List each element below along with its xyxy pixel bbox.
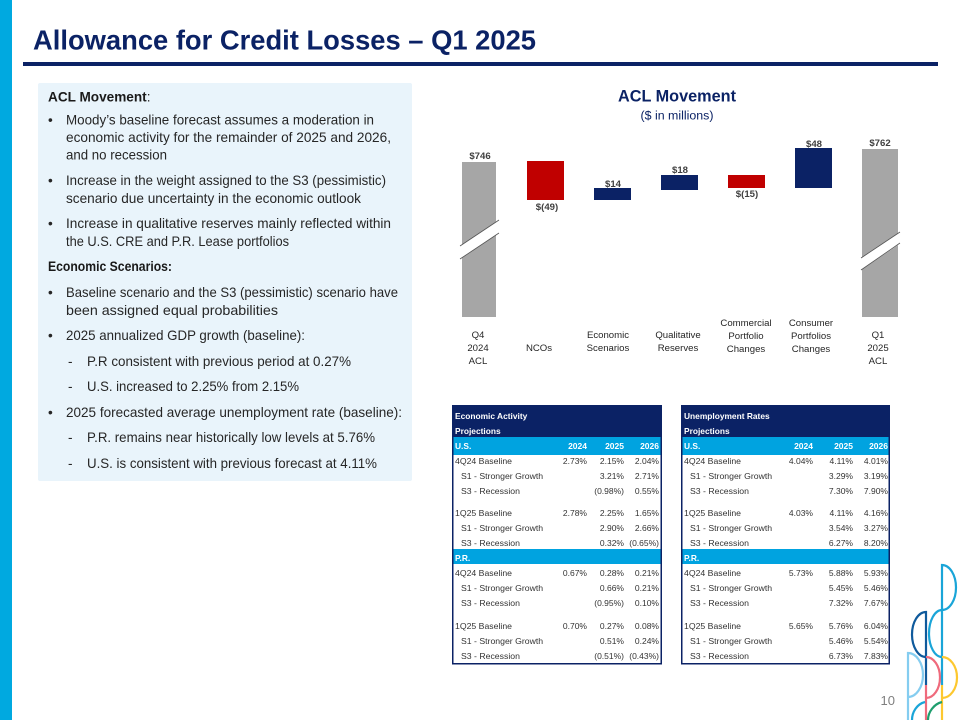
bar: Commercial Portfolio Changes: $(15) [736, 189, 758, 200]
table: Unemployment Rates Projections: 1Q25 Baseline [684, 621, 741, 631]
table: Unemployment Rates Projections: 5.45% [829, 583, 853, 593]
text block: GDP growth: - [68, 379, 73, 394]
table: Unemployment Rates Projections: 3.27% [864, 523, 888, 533]
table: Unemployment Rates Projections: Unemployment Rates [684, 411, 770, 421]
table: Economic Activity Projections: 2.25% [600, 508, 624, 518]
text block: qualitative reserves: Increase in qualitative reserves mainly reflected within [66, 216, 391, 231]
table: Unemployment Rates Projections: S1 - Stronger Growth [690, 523, 772, 533]
table: Economic Activity Projections: 0.32% [600, 538, 624, 548]
table: Economic Activity Projections: 2.71% [635, 471, 659, 481]
waterfall chart [459, 138, 901, 367]
bar: Consumer Portfolios Changes: $48 [806, 139, 823, 150]
table: Economic Activity Projections: 0.24% [635, 636, 659, 646]
category labels: Reserves [658, 343, 698, 354]
category labels: Portfolio [728, 331, 764, 342]
text block: GDP growth: U.S. increased to 2.25% from 2.15% [87, 379, 299, 394]
table: Unemployment Rates Projections: 6.04% [864, 621, 888, 631]
text block: S3 weight [48, 173, 386, 206]
category labels: Commercial [720, 318, 772, 329]
text block: unemployment: 2025 forecasted average unemployment rate (baseline): [66, 405, 402, 420]
table: Economic Activity Projections: 2.04% [635, 456, 659, 466]
table: Economic Activity Projections: (0.43%) [629, 651, 659, 661]
bar: Qualitative Reserves [661, 165, 698, 190]
table: Unemployment Rates Projections: 4.11% [830, 508, 853, 518]
text block: qualitative reserves: the U.S. CRE and P.R. Lease portfolios [66, 234, 289, 249]
table: Unemployment Rates Projections: S1 - Stronger Growth [690, 636, 772, 646]
text block: GDP growth: - [68, 354, 73, 369]
table: Economic Activity Projections: (0.95%) [594, 598, 624, 608]
table: Economic Activity Projections: S3 - Recession [461, 538, 520, 548]
table: Unemployment Rates Projections: 5.46% [864, 583, 888, 593]
text block: unemployment [48, 405, 402, 471]
table: Unemployment Rates Projections: 4.04% [789, 456, 813, 466]
table: Unemployment Rates Projections [681, 405, 890, 664]
text block: qualitative reserves [48, 216, 391, 249]
table: Economic Activity Projections: 2.90% [600, 523, 624, 533]
table: Unemployment Rates Projections: 6.73% [829, 651, 853, 661]
bar: Q1 2025 ACL: $762 [869, 138, 891, 149]
bar: Economic Scenarios [594, 179, 631, 200]
table: Economic Activity Projections: 2.66% [635, 523, 659, 533]
table: Unemployment Rates Projections: 5.65% [789, 621, 813, 631]
table: Unemployment Rates Projections: 4.03% [789, 508, 813, 518]
table: Economic Activity Projections: 2.73% [563, 456, 587, 466]
table: Unemployment Rates Projections: 5.76% [829, 621, 853, 631]
table: Economic Activity Projections: P.R. [455, 553, 470, 563]
icon: brand logo arcs [908, 565, 957, 720]
table: Unemployment Rates Projections: U.S. [684, 441, 700, 451]
table: Unemployment Rates Projections: S3 - Recession [690, 538, 749, 548]
table: Economic Activity Projections: S1 - Stronger Growth [461, 523, 543, 533]
bar: Q4 2024 ACL: $746 [469, 151, 491, 162]
bar: Consumer Portfolios Changes [795, 139, 832, 188]
table: Economic Activity Projections: 0.27% [600, 621, 624, 631]
table: Economic Activity Projections: 0.51% [600, 636, 624, 646]
bar: Qualitative Reserves: $18 [672, 165, 689, 176]
category labels: 2024 [467, 343, 489, 354]
table: Economic Activity Projections: 1.65% [635, 508, 659, 518]
category labels [467, 318, 889, 367]
text block: qualitative reserves: • [48, 216, 53, 231]
table: Unemployment Rates Projections: 5.93% [864, 568, 888, 578]
table: Economic Activity Projections: 0.21% [635, 568, 659, 578]
category labels: 2025 [867, 343, 889, 354]
table: Unemployment Rates Projections: 7.30% [829, 486, 853, 496]
category labels: Changes [727, 344, 765, 355]
text block: S3 weight: Increase in the weight assigned to the S3 (pessimistic) [66, 173, 386, 188]
table: Economic Activity Projections: 2025 [605, 441, 624, 451]
table: Economic Activity Projections: 0.67% [563, 568, 587, 578]
text block: equal probabilities: Baseline scenario and the S3 (pessimistic) scenario have [66, 285, 398, 300]
text block: unemployment: - [68, 456, 73, 471]
table: Economic Activity Projections: 0.70% [563, 621, 587, 631]
table: Economic Activity Projections: Projections [455, 426, 501, 436]
bar: NCOs [527, 161, 564, 213]
table: Economic Activity Projections: S3 - Recession [461, 598, 520, 608]
text block: equal probabilities: been assigned equal probabilities [66, 303, 278, 318]
table: Unemployment Rates Projections: 3.54% [829, 523, 853, 533]
table: Economic Activity Projections: 0.55% [635, 486, 659, 496]
text block: unemployment: • [48, 405, 53, 420]
table: Economic Activity Projections: S3 - Recession [461, 651, 520, 661]
table: Economic Activity Projections: 4Q24 Baseline [455, 456, 512, 466]
category labels: ACL [469, 356, 488, 367]
text block: Moody's forecast: Moody’s baseline forecast assumes a moderation in [66, 112, 374, 128]
category labels: Q4 [472, 330, 485, 341]
text block: equal probabilities [48, 285, 398, 318]
category labels: Scenarios [587, 343, 630, 354]
table: Unemployment Rates Projections: 7.90% [864, 486, 888, 496]
table: Unemployment Rates Projections: 4Q24 Baseline [684, 568, 741, 578]
table: Economic Activity Projections: 1Q25 Baseline [455, 508, 512, 518]
category labels: Qualitative [655, 330, 701, 341]
category labels: Changes [792, 344, 830, 355]
table: Economic Activity Projections [452, 405, 662, 664]
left accent stripe [0, 0, 12, 720]
bar: NCOs: $(49) [536, 202, 558, 213]
table: Unemployment Rates Projections: S3 - Recession [690, 486, 749, 496]
table: Unemployment Rates Projections: 5.73% [789, 568, 813, 578]
table: Unemployment Rates Projections: 4.01% [864, 456, 888, 466]
category labels: NCOs [526, 343, 552, 354]
category labels: Economic [587, 330, 629, 341]
table: Economic Activity Projections: S1 - Stronger Growth [461, 636, 543, 646]
table: Economic Activity Projections: 1Q25 Baseline [455, 621, 512, 631]
title rule [23, 62, 938, 66]
table: Economic Activity Projections: 2.15% [600, 456, 624, 466]
chart heading: ACL Movement [618, 86, 736, 106]
bar: Q4 2024 ACL [459, 151, 500, 317]
title: Allowance for Credit Losses – Q1 2025 [33, 24, 536, 56]
table: Unemployment Rates Projections: 7.67% [864, 598, 888, 608]
text block: GDP growth: P.R consistent with previous period at 0.27% [87, 354, 351, 369]
table: Unemployment Rates Projections: P.R. [684, 553, 699, 563]
heading: Economic Scenarios: Economic Scenarios: [48, 259, 172, 274]
table: Unemployment Rates Projections: 2025 [834, 441, 853, 451]
table: Unemployment Rates Projections: S3 - Recession [690, 598, 749, 608]
chart subtitle: ($ in millions) [640, 110, 714, 122]
table: Unemployment Rates Projections: 6.27% [829, 538, 853, 548]
table: Economic Activity Projections: (0.98%) [594, 486, 624, 496]
table: Unemployment Rates Projections: 5.46% [829, 636, 853, 646]
table: Economic Activity Projections: (0.51%) [594, 651, 624, 661]
table: Economic Activity Projections: S1 - Stronger Growth [461, 583, 543, 593]
heading: ACL Movement: ACL Movement: [48, 90, 150, 104]
category labels: ACL [869, 356, 888, 367]
table: Unemployment Rates Projections: Projections [684, 426, 730, 436]
category labels: Portfolios [791, 331, 831, 342]
table: Unemployment Rates Projections: 3.19% [864, 471, 888, 481]
table: Economic Activity Projections: 2024 [568, 441, 587, 451]
page number: 10 [881, 693, 895, 708]
table: Unemployment Rates Projections: S1 - Stronger Growth [690, 471, 772, 481]
text block: S3 weight: scenario due uncertainty in the economic outlook [66, 191, 361, 206]
text block: unemployment: - [68, 430, 73, 445]
table: Economic Activity Projections: 0.28% [600, 568, 624, 578]
table: Economic Activity Projections: 3.21% [600, 471, 624, 481]
text block: GDP growth: 2025 annualized GDP growth (baseline): [66, 328, 305, 343]
text block: Moody's forecast: • [48, 112, 53, 128]
text block: Moody's forecast: economic activity for the remainder of 2025 and 2026, [66, 130, 391, 145]
table: Economic Activity Projections: 2026 [640, 441, 659, 451]
table: Economic Activity Projections: S3 - Recession [461, 486, 520, 496]
table: Economic Activity Projections: 0.21% [635, 583, 659, 593]
table: Unemployment Rates Projections: S1 - Stronger Growth [690, 583, 772, 593]
table: Economic Activity Projections: U.S. [455, 441, 471, 451]
table: Economic Activity Projections: 0.10% [635, 598, 659, 608]
category labels: Q1 [872, 330, 884, 341]
table: Economic Activity Projections: Economic Activity [455, 411, 528, 421]
table: Economic Activity Projections: (0.65%) [629, 538, 659, 548]
category labels: Consumer [789, 318, 834, 329]
table: Economic Activity Projections: S1 - Stronger Growth [461, 471, 543, 481]
table: Unemployment Rates Projections: 2026 [869, 441, 888, 451]
text block: unemployment: U.S. is consistent with previous forecast at 4.11% [87, 456, 377, 471]
table: Unemployment Rates Projections: 5.54% [864, 636, 888, 646]
table: Unemployment Rates Projections: 4Q24 Baseline [684, 456, 741, 466]
bar: Q1 2025 ACL [860, 138, 901, 317]
table: Unemployment Rates Projections: 8.20% [864, 538, 888, 548]
table: Economic Activity Projections: 4Q24 Baseline [455, 568, 512, 578]
table: Unemployment Rates Projections: S3 - Recession [690, 651, 749, 661]
table: Unemployment Rates Projections: 4.11% [830, 456, 853, 466]
table: Unemployment Rates Projections: 1Q25 Baseline [684, 508, 741, 518]
table: Economic Activity Projections: 0.08% [635, 621, 659, 631]
table: Unemployment Rates Projections: 5.88% [829, 568, 853, 578]
table: Unemployment Rates Projections: 3.29% [829, 471, 853, 481]
table: Unemployment Rates Projections: 7.83% [864, 651, 888, 661]
text block: Moody's forecast [48, 112, 391, 162]
table: Unemployment Rates Projections: 7.32% [829, 598, 853, 608]
panel: ACL movement commentary [38, 83, 412, 481]
text block: unemployment: P.R. remains near historically low levels at 5.76% [87, 430, 375, 445]
text block: Moody's forecast: and no recession [66, 148, 167, 162]
text block: S3 weight: • [48, 173, 53, 188]
text block: GDP growth [48, 328, 351, 394]
table: Unemployment Rates Projections: 2024 [794, 441, 813, 451]
text block: equal probabilities: • [48, 285, 53, 300]
table: Economic Activity Projections: 2.78% [563, 508, 587, 518]
table: Unemployment Rates Projections: 4.16% [864, 508, 888, 518]
bar: Economic Scenarios: $14 [605, 179, 622, 190]
bar: Commercial Portfolio Changes [728, 175, 765, 200]
table: Economic Activity Projections: 0.66% [600, 583, 624, 593]
text block: GDP growth: • [48, 328, 53, 343]
